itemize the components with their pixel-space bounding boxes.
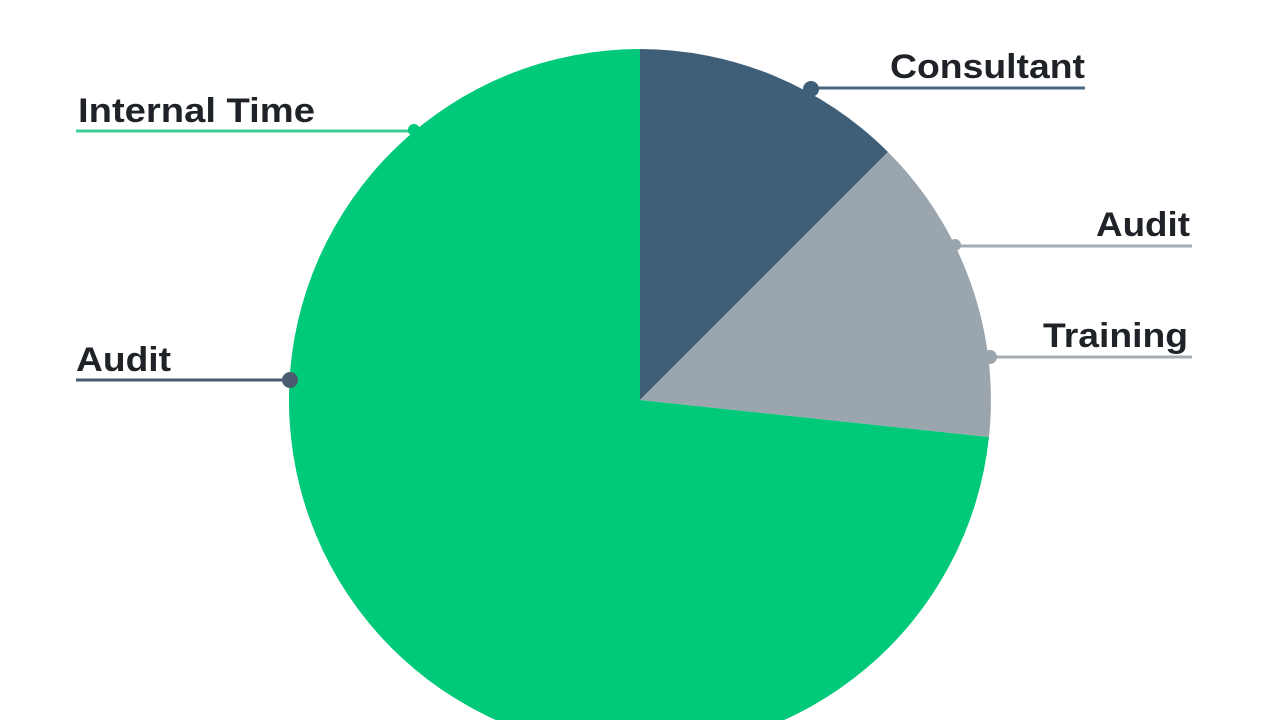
pie chart [289,49,991,720]
label: Audit (right) [949,206,1192,251]
label: Training [983,317,1192,364]
label: Consultant [803,48,1085,97]
slice: consultant (dark blue) [640,49,888,400]
label: Training: Training [1043,317,1188,355]
label: Audit (left): Audit [76,341,171,379]
slice: audit/training (gray) [640,152,991,437]
label: Audit (right): Audit [1096,206,1190,244]
label: Internal Time: Internal Time [78,92,315,130]
slice: internal time (green) [289,49,989,720]
label: Audit (left) [76,341,298,388]
label: Consultant: Consultant [890,48,1085,86]
label: Internal Time [76,92,420,136]
